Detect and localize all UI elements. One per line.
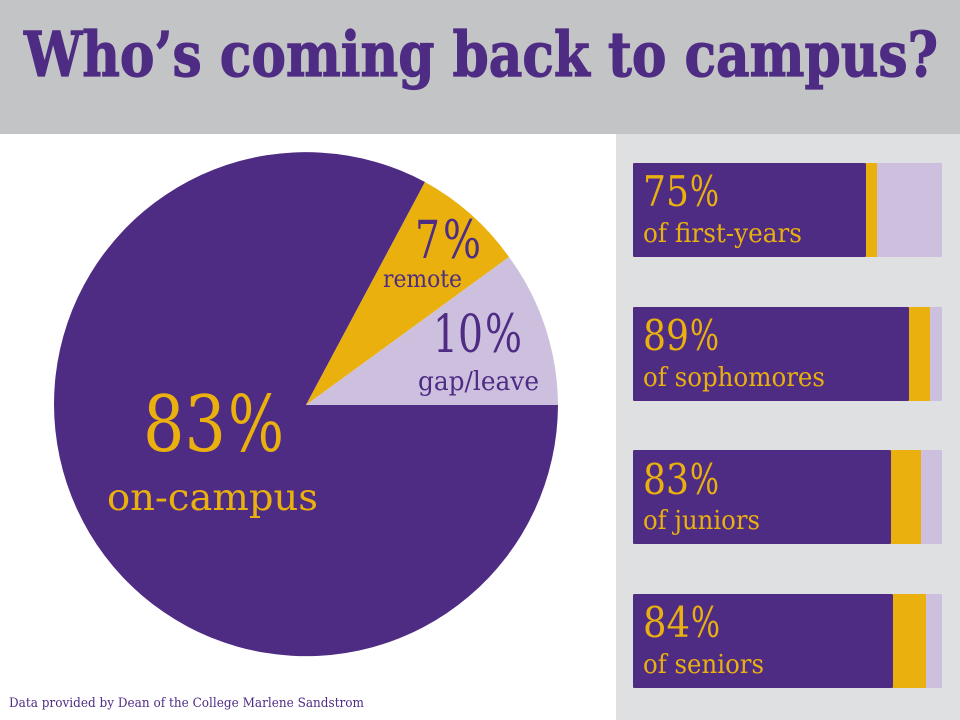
slice: on-campus — [54, 152, 558, 656]
label: 10% gap/leave: % — [485, 305, 522, 365]
text: 75% of first-years — [643, 167, 802, 249]
text: 83% of juniors: % — [690, 455, 719, 504]
label: 7% remote: 7 — [415, 211, 440, 271]
label: 83% on-campus: % — [228, 380, 284, 470]
text: 75% of first-years: 75 — [643, 167, 689, 216]
text: 83% of juniors — [643, 455, 760, 536]
text: 84% of seniors — [643, 598, 764, 680]
bar: sophomores — [633, 307, 942, 401]
label: 7% remote — [383, 211, 481, 293]
panel: header — [0, 0, 960, 134]
text: 83% of juniors: of juniors — [643, 506, 760, 536]
text: 84% of seniors: of seniors — [643, 650, 764, 680]
label: 83% on-campus — [107, 380, 318, 519]
text: 84% of seniors: 84 — [643, 598, 690, 647]
source note: Data provided by Dean of the College Marlene Sandstrom — [9, 696, 364, 711]
bar: first-years — [633, 163, 942, 257]
text: 89% of sophomores — [643, 311, 825, 393]
text: 89% of sophomores: % — [690, 311, 719, 360]
label: 7% remote: remote — [383, 265, 462, 293]
text: 84% of seniors: % — [691, 598, 720, 647]
text: 89% of sophomores: of sophomores — [643, 363, 825, 393]
label: 10% gap/leave: gap/leave — [418, 367, 539, 397]
label: 10% gap/leave — [418, 305, 539, 397]
slice: remote — [306, 182, 509, 405]
text: 83% of juniors: 83 — [643, 455, 689, 504]
label: 83% on-campus: on-campus — [107, 476, 318, 519]
label: 83% on-campus: 83 — [143, 380, 226, 470]
panel: class-year sidebar background — [616, 134, 960, 720]
label: 7% remote: % — [443, 211, 481, 271]
text: 75% of first-years: % — [690, 167, 719, 216]
bar: juniors — [633, 450, 942, 544]
slice: gap/leave — [306, 257, 558, 405]
text: 75% of first-years: of first-years — [643, 219, 802, 249]
text: 89% of sophomores: 89 — [643, 311, 689, 360]
pie chart — [54, 152, 558, 656]
label: 10% gap/leave: 10 — [433, 305, 483, 365]
bar: seniors — [633, 594, 942, 688]
